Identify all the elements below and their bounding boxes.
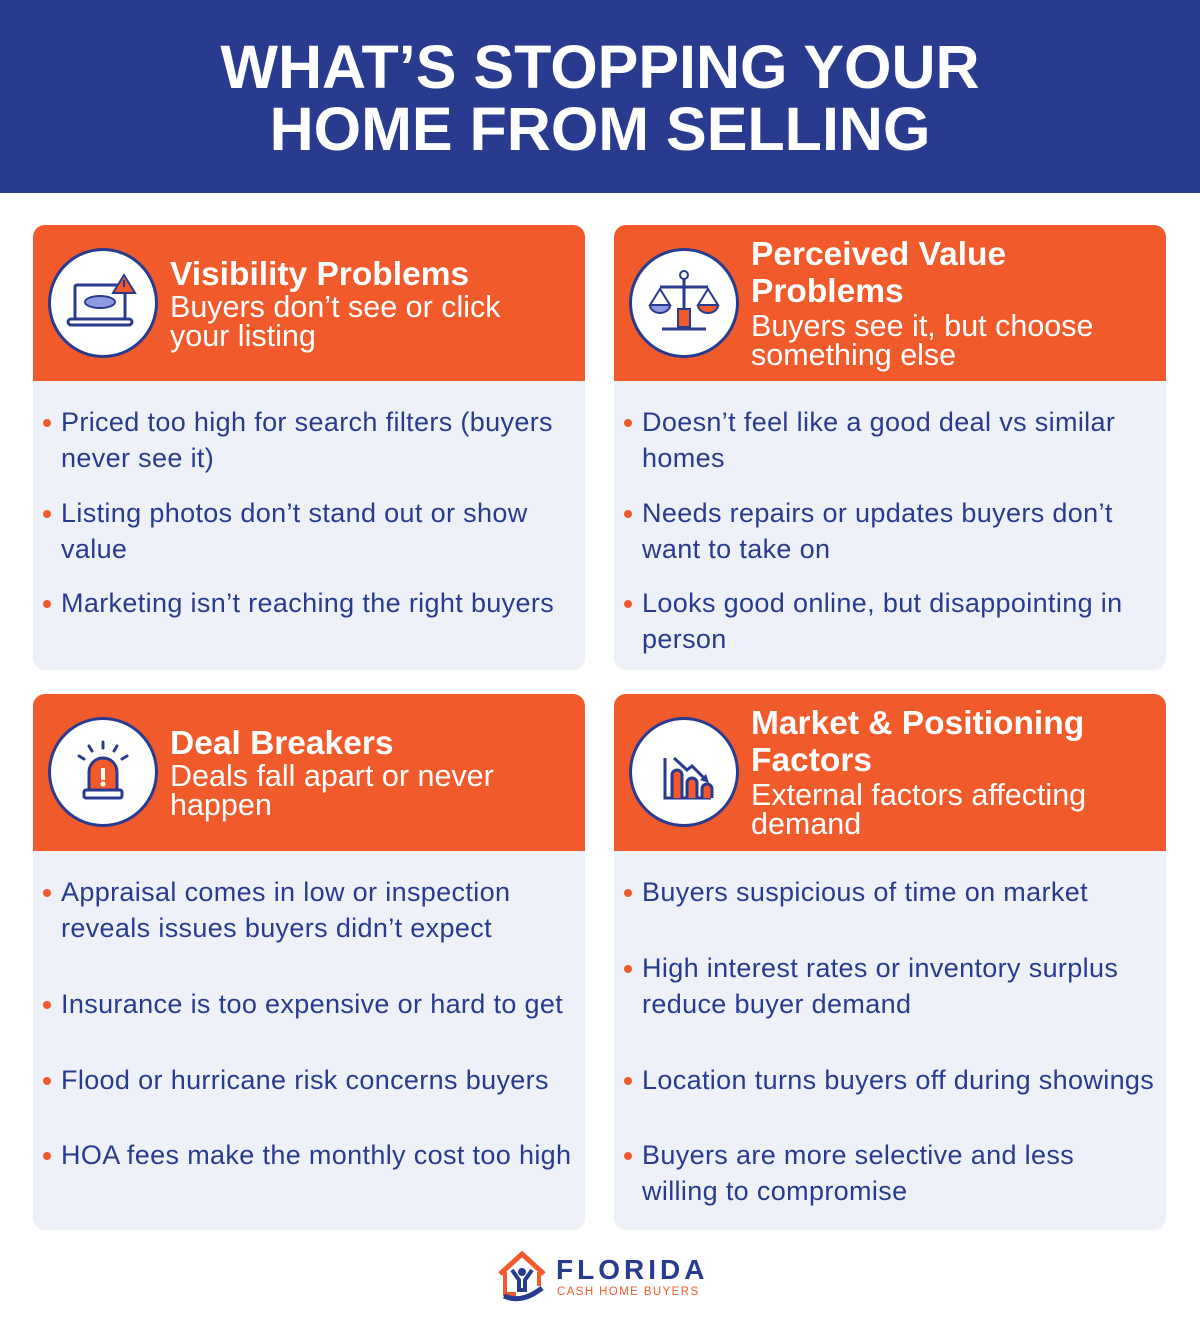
icon: alarm (48, 717, 158, 827)
panel: deal breakers (33, 694, 585, 1230)
heading text: Buyers don’t see or click (170, 290, 501, 324)
bullet list (624, 877, 1154, 1206)
panel: deal breakers: Appraisal comes in low or inspection (61, 877, 510, 907)
panel header: deal breakers (33, 694, 585, 851)
panel: market & positioning: Buyers suspicious of time on market (642, 877, 1088, 907)
panel: deal breakers: Flood or hurricane risk concerns buyers (61, 1065, 549, 1095)
heading text: happen (170, 788, 272, 822)
title: WHAT’S STOPPING YOUR (220, 33, 980, 101)
icon: scales (629, 248, 739, 358)
bullet list (624, 407, 1123, 654)
panel header: visibility (33, 225, 585, 381)
panel: market & positioning (614, 694, 1166, 1230)
title: HOME FROM SELLING (270, 95, 930, 163)
panel: perceived value problems: Doesn’t feel like a good deal vs similar (642, 407, 1115, 437)
panel: perceived value problems: want to take on (642, 534, 830, 564)
panel: market & positioning: willing to compromise (642, 1176, 907, 1206)
panel: visibility problems (33, 225, 585, 670)
panel: visibility problems: Marketing isn’t reaching the right buyers (61, 588, 554, 618)
heading text (170, 725, 494, 822)
icon: house with person (498, 1250, 546, 1302)
icon: falling chart (629, 717, 739, 827)
title (0, 0, 1200, 193)
logo: CASH HOME BUYERS (557, 1286, 700, 1298)
heading text (170, 256, 501, 353)
panel: perceived value problems: person (642, 624, 727, 654)
logo (498, 1250, 708, 1302)
heading text: Buyers see it, but choose (751, 309, 1093, 343)
heading text: Deals fall apart or never (170, 759, 494, 793)
heading text (751, 236, 1093, 372)
panel header: market (614, 694, 1166, 851)
panel: deal breakers: reveals issues buyers didn’t expect (61, 913, 492, 943)
panel header: perceived value (614, 225, 1166, 381)
heading text: Visibility Problems (170, 256, 469, 293)
panel: perceived value problems: homes (642, 443, 725, 473)
panel: visibility problems: value (61, 534, 127, 564)
heading text: Factors (751, 742, 872, 779)
panel: market & positioning: reduce buyer demand (642, 989, 911, 1019)
panel: deal breakers: HOA fees make the monthly cost too high (61, 1140, 571, 1170)
panel: market & positioning: Buyers are more selective and less (642, 1140, 1074, 1170)
panel: perceived value problems: Looks good online, but disappointing in (642, 588, 1123, 618)
heading text: External factors affecting (751, 778, 1086, 812)
heading text: your listing (170, 319, 316, 353)
panel: market & positioning: High interest rates or inventory surplus (642, 953, 1118, 983)
heading text: Market & Positioning (751, 705, 1084, 742)
heading text: Deal Breakers (170, 725, 394, 762)
heading text: Problems (751, 273, 904, 310)
brand text: FLORIDA (556, 1254, 708, 1285)
heading text (751, 705, 1086, 841)
panel: visibility problems: never see it) (61, 443, 214, 473)
bullet list (43, 877, 571, 1170)
bullet list (43, 407, 554, 618)
panel: visibility problems: Listing photos don’t stand out or show (61, 498, 528, 528)
panel: deal breakers: Insurance is too expensive or hard to get (61, 989, 563, 1019)
panel: perceived value problems (614, 225, 1166, 670)
panel: market & positioning: Location turns buyers off during showings (642, 1065, 1154, 1095)
heading text: demand (751, 807, 861, 841)
icon: laptop warning (48, 248, 158, 358)
heading text: Perceived Value (751, 236, 1006, 273)
panel: visibility problems: Priced too high for search filters (buyers (61, 407, 553, 437)
panel: perceived value problems: Needs repairs or updates buyers don’t (642, 498, 1113, 528)
heading text: something else (751, 338, 956, 372)
